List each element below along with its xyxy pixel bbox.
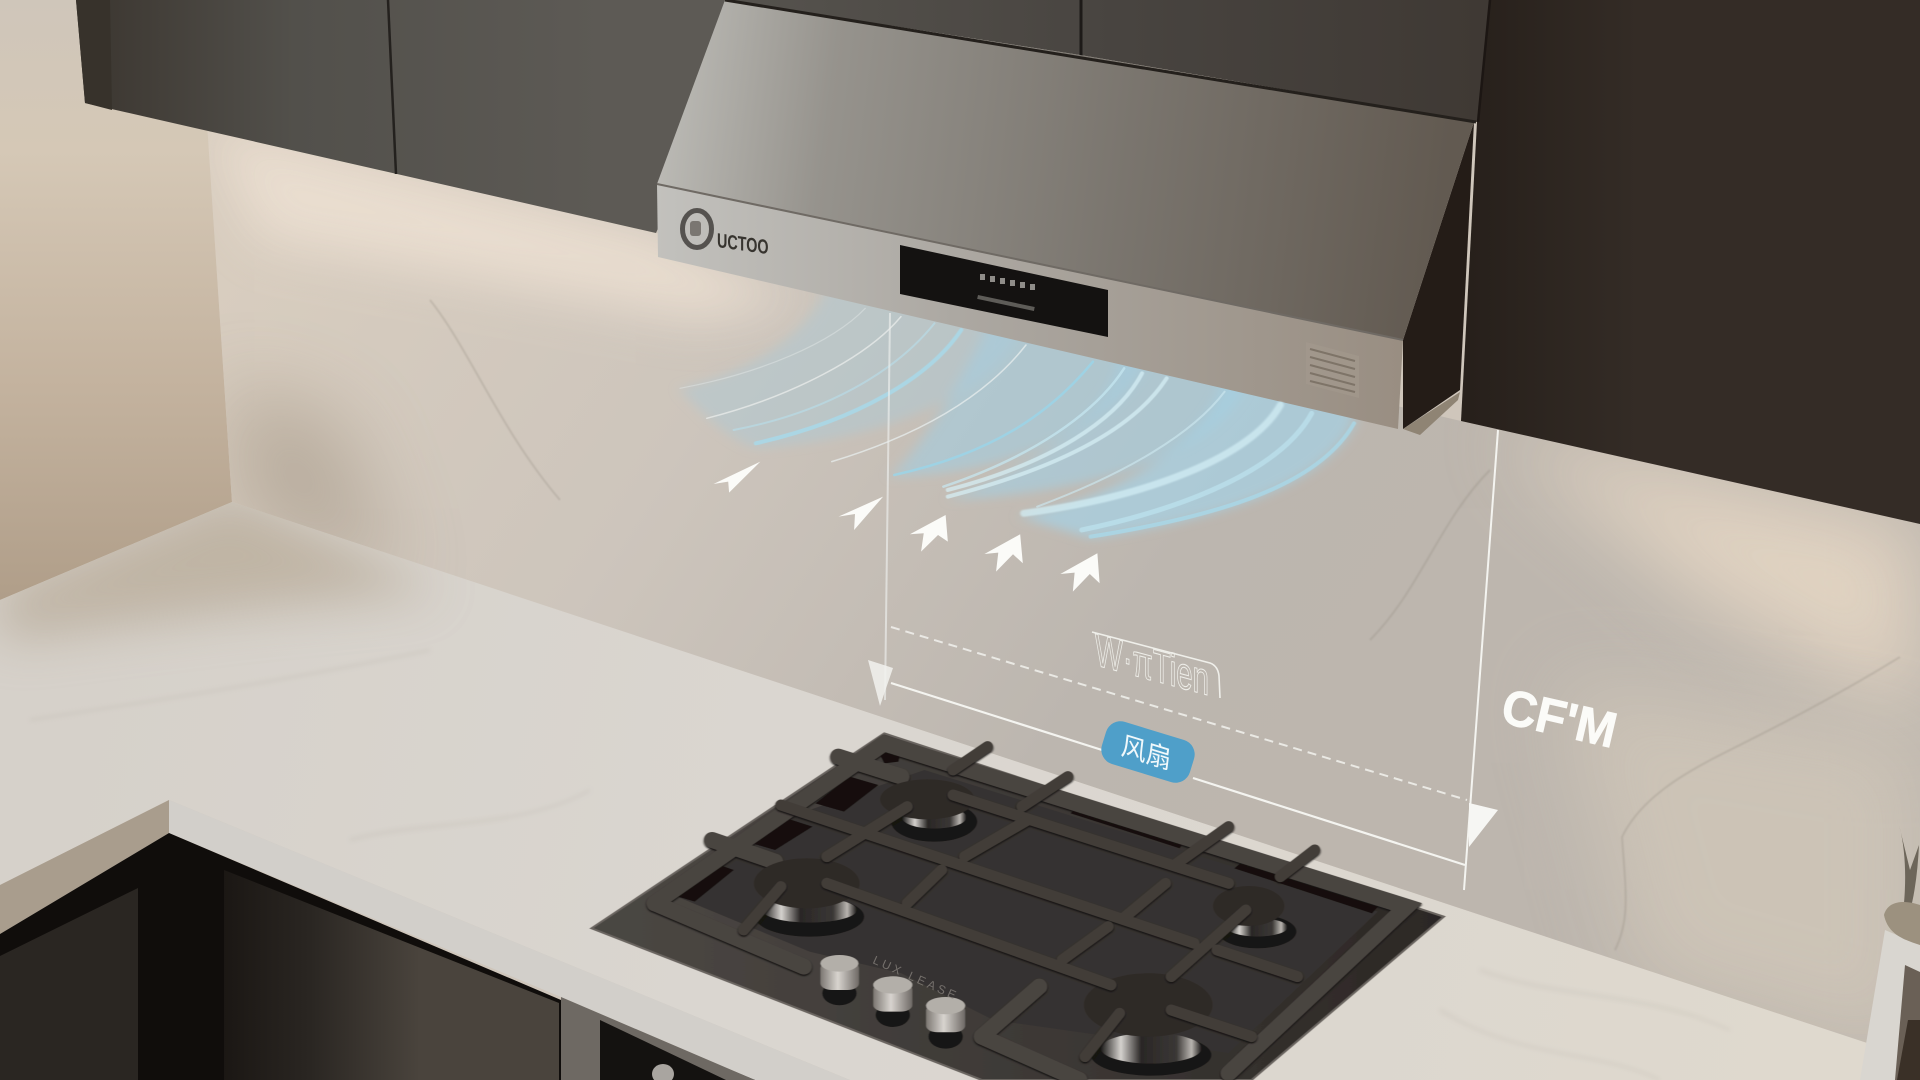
counter front edge: [169, 800, 850, 1080]
countertop: [0, 490, 1920, 1080]
hood dark side: [1403, 122, 1474, 429]
width dimension lines: [868, 313, 1498, 890]
right arrowhead: [1469, 803, 1498, 847]
brand logo: [682, 210, 768, 259]
counter left edge: [0, 800, 169, 934]
grate bars: [744, 747, 1315, 1057]
blue air label pill: 风扇: [1119, 730, 1173, 775]
oven below cooktop: [561, 997, 755, 1080]
plant stem: [1899, 825, 1919, 903]
upper left cabinets: [76, 0, 760, 233]
lower cabinets: [0, 833, 755, 1080]
hood front panel: [657, 184, 1403, 429]
hood vent slats: [1306, 342, 1359, 398]
cooktop: [591, 733, 1444, 1080]
cooktop plate: [591, 733, 1444, 1080]
outlined width label: W·πTien: [1095, 624, 1209, 706]
airflow streams: [680, 308, 1354, 537]
blue air label pill: [1098, 718, 1198, 786]
oven knob: [652, 1064, 674, 1080]
vase body: [1860, 930, 1920, 1080]
airflow arrows: [713, 462, 1100, 592]
cooktop label: LUX LEASE: [871, 953, 961, 1003]
control display: [900, 245, 1108, 337]
vase rim: [1884, 902, 1920, 945]
solid width line: [891, 683, 1102, 750]
hood sloped top: [657, 0, 1474, 340]
airflow haze: [680, 280, 1359, 538]
burners: [754, 779, 1296, 1076]
control knobs: [821, 955, 965, 1049]
left side wall: [0, 0, 232, 600]
recessed wells: [675, 770, 1378, 1053]
grate frame: [655, 743, 1407, 1080]
range hood: [657, 0, 1476, 435]
black gaps in frame: [675, 748, 1378, 913]
left vertical guide: [885, 313, 890, 700]
outlined width label: [1092, 624, 1220, 706]
CFM label: CF'M: [1497, 678, 1622, 759]
brand logo: UCTOO: [717, 230, 768, 259]
upper cabinets above hood: [725, 0, 1920, 524]
marble backsplash wall: [200, 120, 1920, 1080]
glass vase with plant: [1860, 825, 1920, 1080]
left arrowhead: [868, 660, 893, 706]
dashed width line: [891, 627, 1467, 800]
right vertical guide: [1464, 430, 1498, 890]
